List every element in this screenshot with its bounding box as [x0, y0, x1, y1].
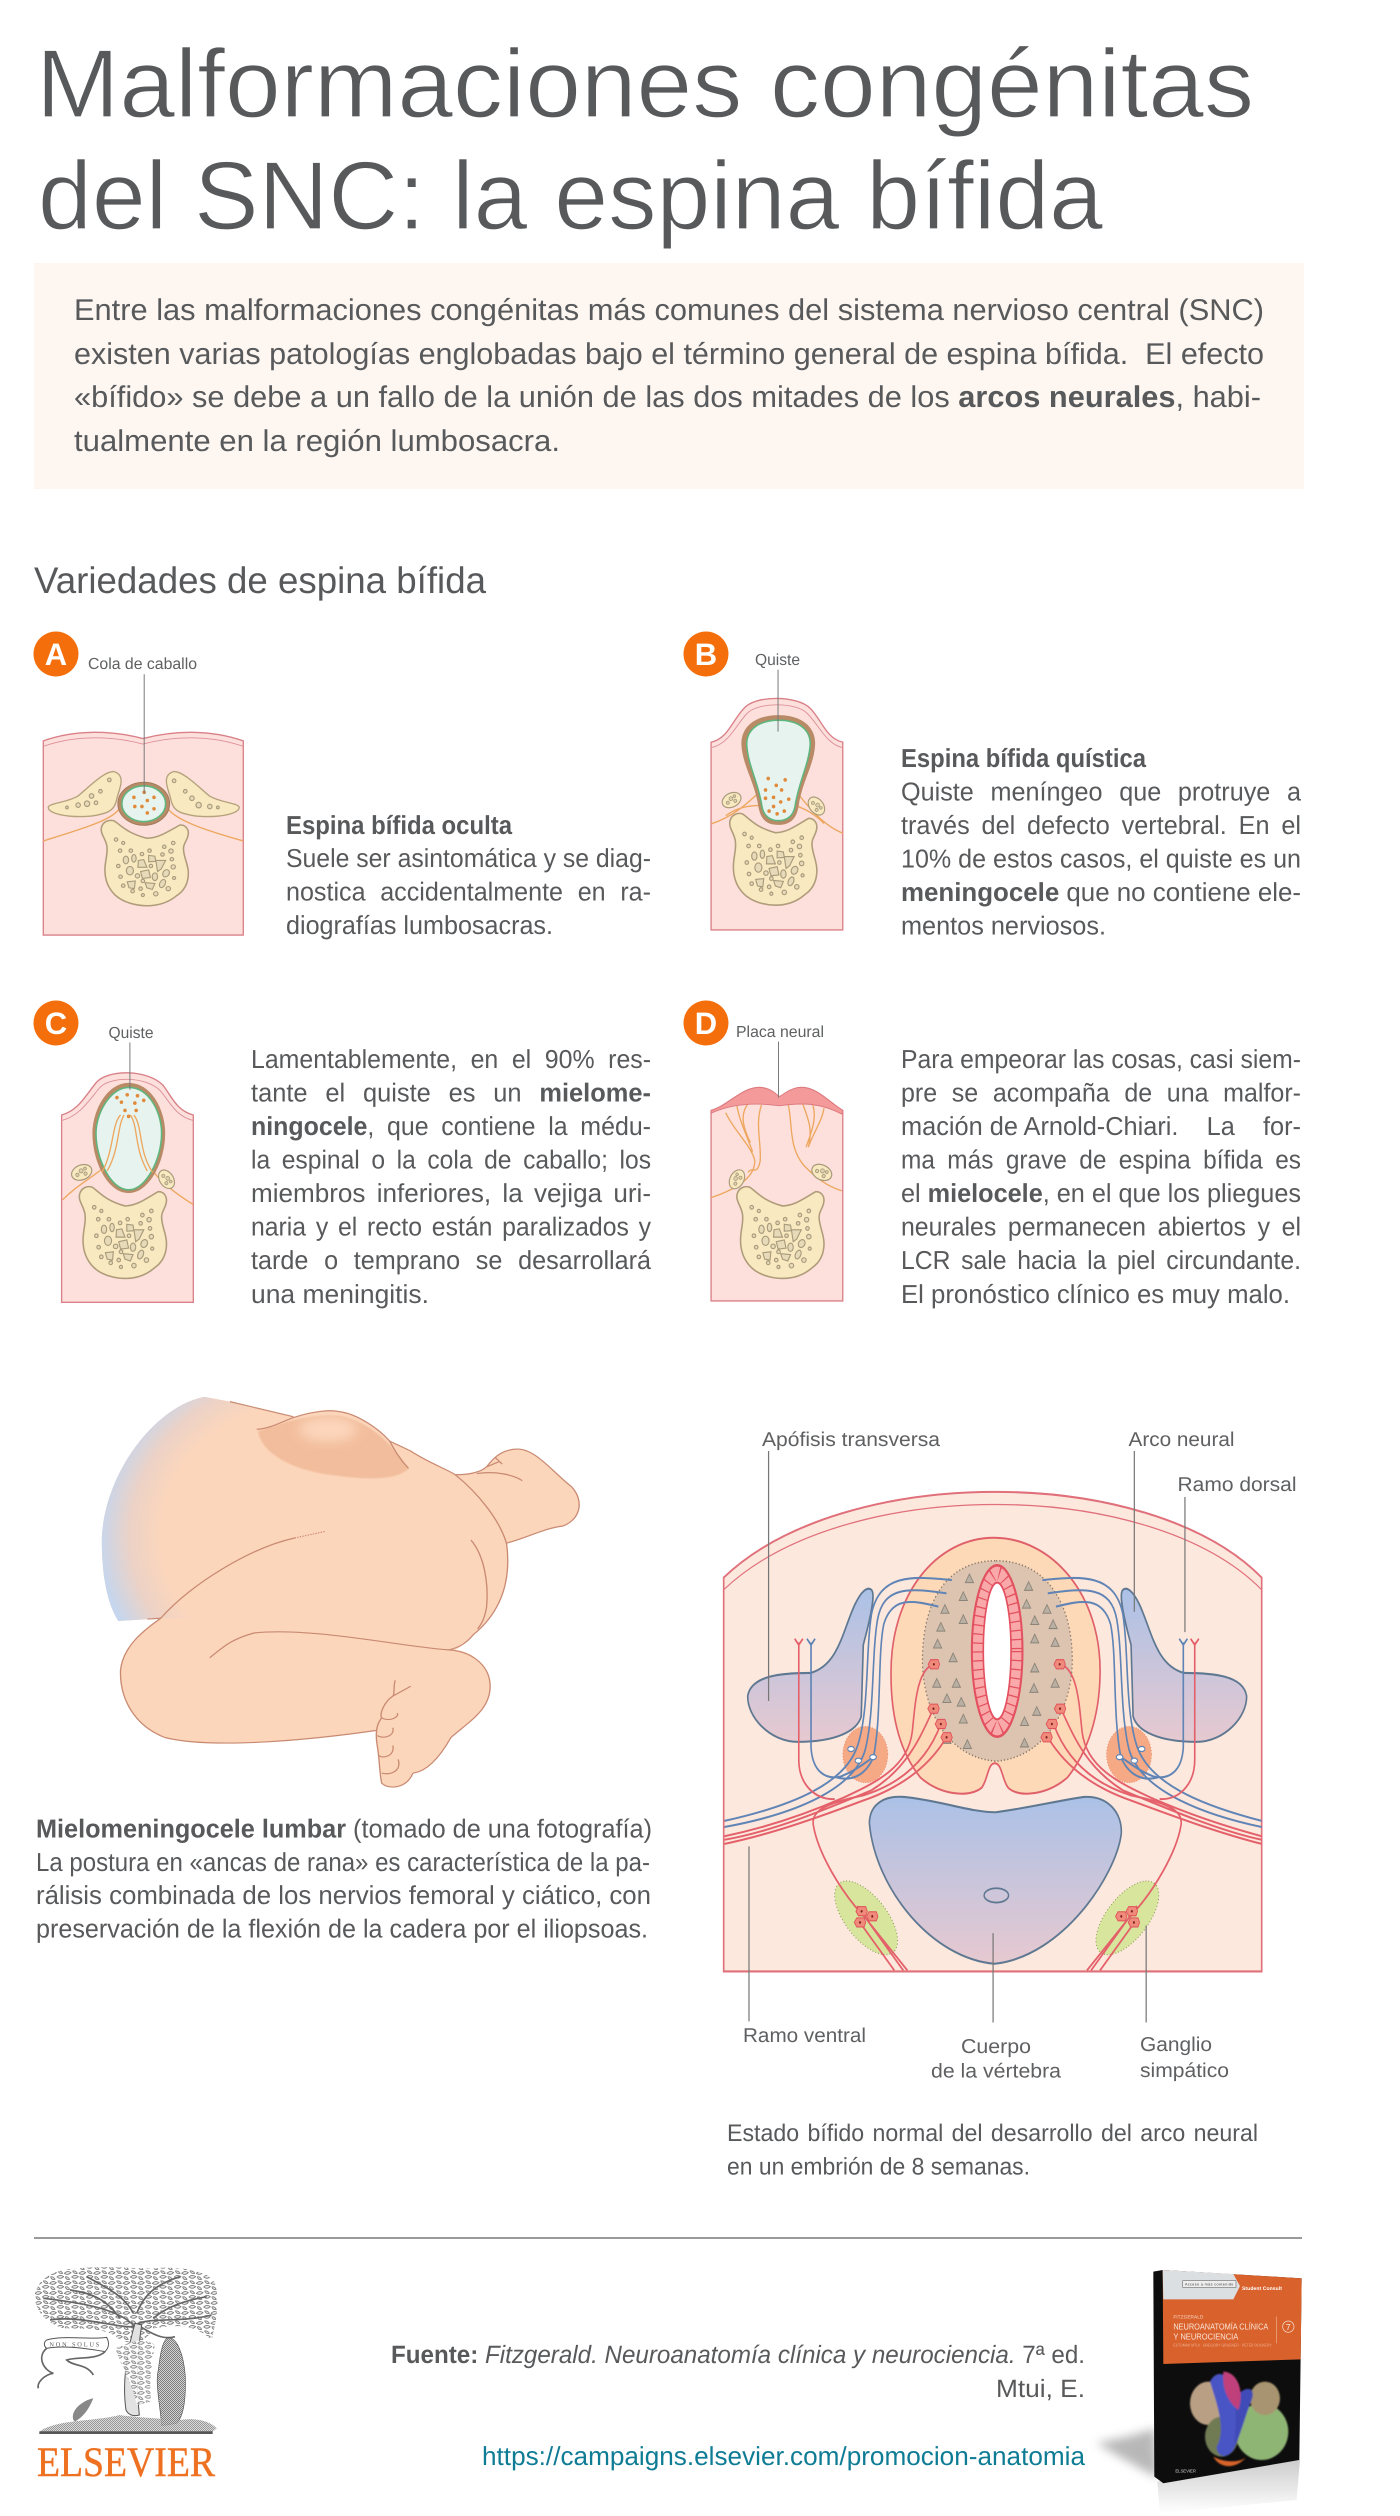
book brain image — [1190, 2372, 1288, 2466]
text C: ningocele, que contiene la médu- — [251, 1111, 651, 1141]
text: mielomeningocele lumbar: preservación de la flexión de la cadera por el iliopsoas. — [36, 1914, 648, 1944]
panel: introduction: tualmente en la región lumbosacra. — [74, 425, 560, 458]
footer rule — [34, 2237, 1302, 2239]
text D: ma más grave de espina bífida es — [901, 1144, 1301, 1174]
diagram labels: Apófisis transversa — [762, 1429, 941, 1451]
panel B: espina bífida quística — [684, 632, 1302, 940]
text D: el mielocele, en el que los pliegues — [901, 1178, 1301, 1208]
panel: introduction: Entre las malformaciones congénitas más comunes del sistema nervioso central (SNC) — [74, 294, 1264, 327]
label: quiste C: Quiste — [108, 1025, 154, 1042]
diagram labels — [743, 1429, 1296, 2082]
book cover: Y NEUROCIENCIA — [1173, 2331, 1239, 2341]
leader lines — [749, 1451, 1185, 2022]
vertebral body — [869, 1797, 1121, 1964]
book cover: Acceso a más contenido — [1185, 2283, 1233, 2287]
text D: pre se acompaña de una malfor- — [901, 1078, 1301, 1108]
diagram labels: de la vértebra — [931, 2060, 1062, 2082]
panel A: espina bífida oculta — [34, 632, 651, 940]
panel C: mielomeningocele — [34, 1000, 652, 1309]
nerves left — [724, 1578, 952, 1970]
wordmark: ELSEVIER: ELSEVIER — [37, 2440, 215, 2486]
text B: Espina bífida quística — [901, 743, 1146, 773]
diagram: neural arch in 8-week embryo — [724, 1429, 1296, 2082]
text A: Espina bífida oculta — [286, 810, 512, 840]
text D: Para empeorar las cosas, casi siem- — [901, 1044, 1301, 1074]
book cover: 7 — [1286, 2322, 1291, 2332]
spinal cord — [891, 1538, 1100, 1794]
diagram labels: simpático — [1140, 2060, 1229, 2082]
panel D: mielocele — [684, 1000, 1301, 1309]
text C: tarde o temprano se desarrollará — [251, 1245, 652, 1275]
nerve cell bodies — [848, 1660, 1145, 1927]
illustration B — [711, 670, 843, 930]
diagram labels: Ramo dorsal — [1178, 1474, 1296, 1496]
panel: introduction: existen varias patologías englobadas bajo el término general de espina bífida. El efecto — [74, 338, 1264, 371]
text A — [286, 810, 651, 940]
illustration: baby with lumbar myelomeningocele — [102, 1397, 579, 1787]
title: Malformaciones congénitas — [36, 29, 1254, 138]
left edge blue shading — [102, 1397, 268, 1621]
caption: estado bífido: en un embrión de 8 semanas. — [727, 2154, 1030, 2180]
text: mielomeningocele lumbar: Mielomeningocele lumbar (tomado de una fotografía) — [36, 1814, 652, 1844]
diagram labels: Ramo ventral — [743, 2025, 866, 2047]
title — [36, 29, 1254, 250]
label: placa neural: Placa neural — [736, 1024, 824, 1041]
text: mielomeningocele lumbar: rálisis combinada de los nervios femoral y ciático, con — [36, 1880, 651, 1910]
text B: mentos nerviosos. — [901, 910, 1106, 940]
book cover: Student Consult — [1242, 2286, 1282, 2291]
sympathetic ganglia — [825, 1868, 1169, 1968]
book cover: FITZGERALD — [1173, 2314, 1203, 2320]
badge B — [684, 632, 728, 676]
logo: Elsevier tree — [35, 2267, 217, 2486]
nerves right — [1042, 1578, 1262, 1970]
logo: Elsevier tree: NON SOLUS — [49, 2341, 99, 2348]
heading: variedades: Variedades de espina bífida — [34, 560, 486, 601]
text D: El pronóstico clínico es muy malo. — [901, 1279, 1290, 1309]
illustration C — [62, 1042, 193, 1302]
illustration D — [711, 1042, 843, 1301]
illustration A — [43, 674, 243, 935]
text: mielomeningocele lumbar — [36, 1814, 652, 1944]
text: mielomeningocele lumbar: La postura en «ancas de rana» es característica de la pa- — [36, 1847, 650, 1877]
source text: Fuente: Fitzgerald. Neuroanatomía clínica y neurociencia. 7ª ed. — [391, 2341, 1085, 2369]
book shadow — [1097, 2428, 1158, 2478]
link: https://campaigns.elsevier.com/promocion-anatomia — [482, 2441, 1086, 2471]
text D: LCR sale hacia la piel circundante. — [901, 1245, 1301, 1275]
badge B: B — [695, 637, 717, 672]
text C: Lamentablemente, en el 90% res- — [251, 1044, 651, 1074]
text A: diografías lumbosacras. — [286, 910, 553, 940]
text B: 10% de estos casos, el quiste es un — [901, 844, 1301, 874]
dorsal root ganglia — [843, 1727, 1151, 1783]
diagram labels: Ganglio — [1140, 2034, 1212, 2056]
source text: Mtui, E. — [996, 2375, 1085, 2403]
diagram labels: Cuerpo — [961, 2036, 1031, 2058]
text C — [251, 1044, 652, 1309]
diagram labels: Arco neural — [1128, 1429, 1234, 1451]
text D: neurales permanecen abiertos y el — [901, 1212, 1301, 1242]
book cover: ELSEVIER — [1175, 2469, 1196, 2474]
book cover — [1097, 2270, 1302, 2513]
book cover: ESTOMAK MTUI · GREGORY GRUENER · PETER DOCKERY — [1173, 2343, 1272, 2348]
text C: miembros inferiores, la vejiga uri- — [251, 1178, 651, 1208]
source text — [391, 2341, 1085, 2403]
text B — [901, 743, 1302, 940]
panel: introduction — [34, 263, 1304, 489]
title: del SNC: la espina bífida — [38, 141, 1103, 250]
badge D: D — [695, 1006, 717, 1041]
badge A — [34, 632, 78, 676]
badge A: A — [45, 637, 67, 672]
text B: meningocele que no contiene ele- — [901, 877, 1301, 907]
panel: introduction: «bífido» se debe a un fallo de la unión de las dos mitades de los arcos neurales, habi- — [74, 381, 1261, 414]
badge C: C — [45, 1006, 67, 1041]
label: quiste B: Quiste — [755, 652, 800, 669]
text B: Quiste meníngeo que protruye a — [901, 776, 1302, 806]
book cover: NEUROANATOMÍA CLÍNICA — [1173, 2321, 1268, 2331]
caption: estado bífido: Estado bífido normal del desarrollo del arco neural — [727, 2120, 1258, 2147]
text D: mación de Arnold-Chiari. La for- — [901, 1111, 1301, 1141]
text C: una meningitis. — [251, 1279, 429, 1309]
text C: tante el quiste es un mielome- — [251, 1078, 651, 1108]
text D — [901, 1044, 1301, 1309]
text A: nostica accidentalmente en ra- — [286, 876, 651, 906]
meningocele bulge shading — [258, 1415, 408, 1478]
text B: través del defecto vertebral. En el — [901, 810, 1301, 840]
text A: Suele ser asintomática y se diag- — [286, 843, 651, 873]
badge D — [684, 1000, 728, 1046]
text C: naria y el recto están paralizados y — [251, 1212, 651, 1242]
badge C — [34, 1000, 78, 1046]
text C: la espinal o la cola de caballo; los — [251, 1144, 651, 1174]
caption: estado bífido — [727, 2120, 1258, 2180]
transverse process and neural arch — [748, 1589, 1247, 1742]
label: cola de caballo: Cola de caballo — [88, 656, 197, 673]
